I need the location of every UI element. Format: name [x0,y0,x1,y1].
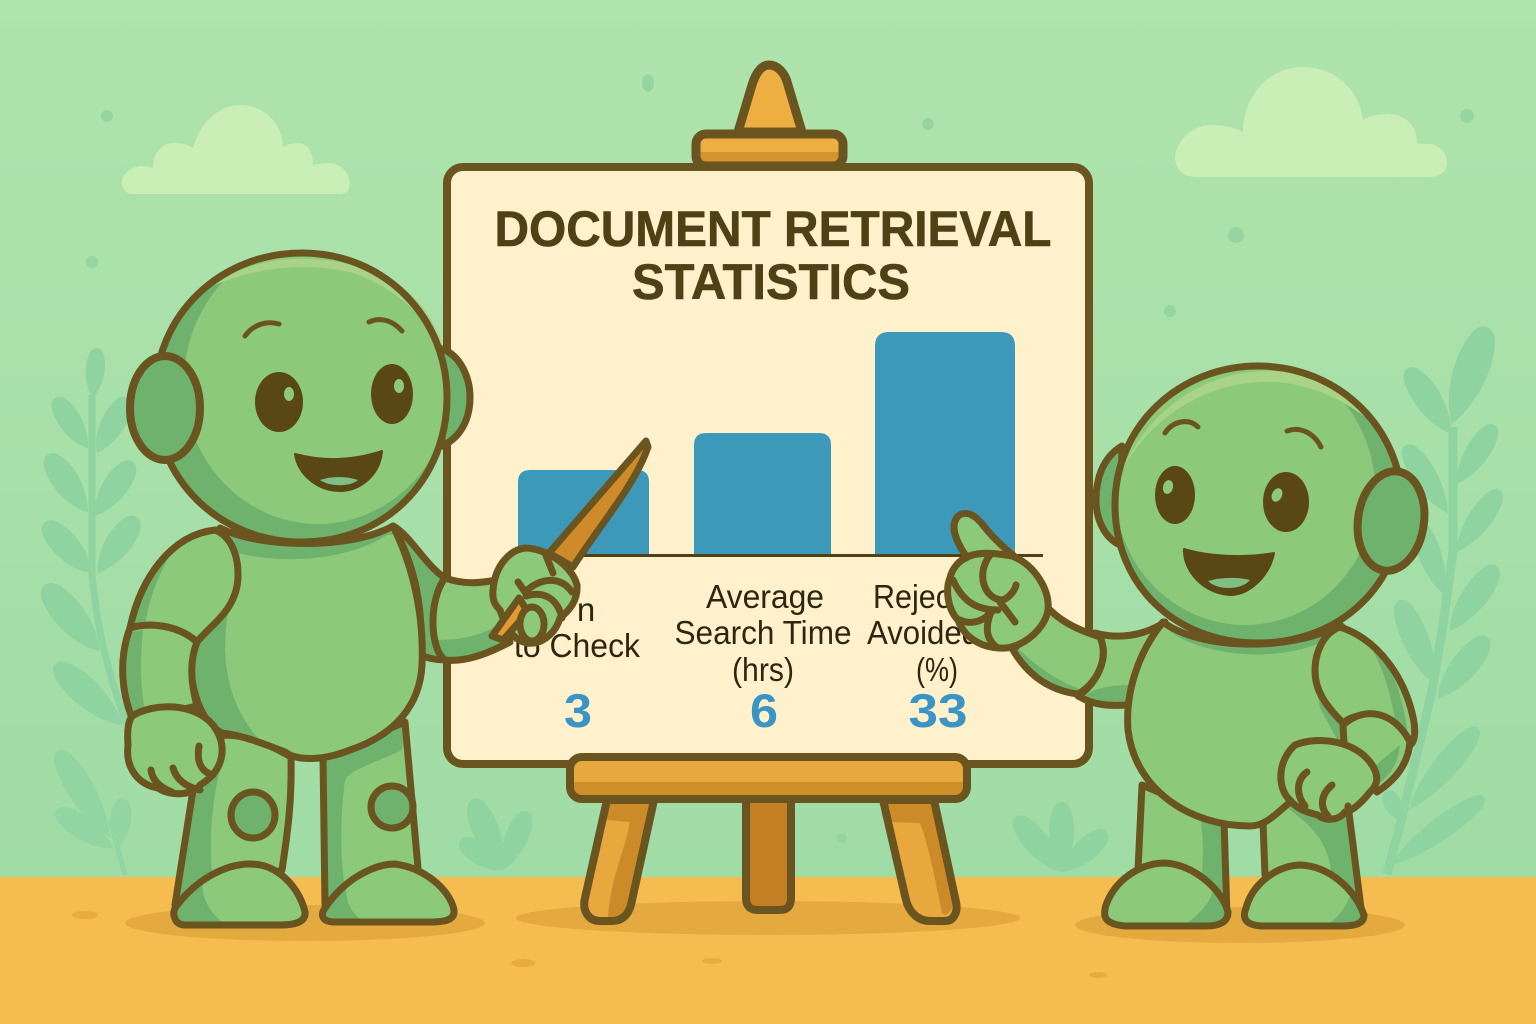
left robot lower arm [123,625,197,720]
label: average search time [674,578,852,688]
easel center leg [746,798,791,910]
left robot far ear [440,348,470,446]
easel tray [570,757,967,799]
left robot foot two [322,864,454,922]
values: 3 [564,684,592,737]
shadow right robot [1075,907,1405,943]
left robot mouth [295,451,382,491]
label: to check: n [577,591,595,628]
left robot upper arm [130,530,238,642]
pointer stick lower [492,598,528,640]
left robot body [190,526,430,770]
values: 6 [750,684,778,737]
right robot pointing hand [948,513,1048,648]
right robot mouth [1184,549,1274,595]
chart board panel [447,167,1089,764]
right robot eyes [1155,466,1309,532]
left robot head [155,240,452,542]
title: DOCUMENT RETRIEVAL [494,201,1052,257]
right robot near ear [1351,467,1431,575]
label: rejections avoided: Avoided [867,614,979,651]
values [564,684,968,737]
pointing index finger [954,513,1014,556]
right robot body [1124,618,1346,830]
shadow left robot [125,905,485,941]
right robot pointing upper arm [1078,622,1165,705]
left robot resting hand [128,707,222,794]
plant left lower [46,744,133,875]
right robot eyebrows [1165,422,1321,447]
left robot pointing upper arm [393,526,445,660]
easel [584,65,957,921]
shadow easel [516,901,1020,935]
right robot head [1115,355,1402,643]
bar: to check [518,470,649,555]
bar: average search time [694,433,831,555]
easel top cap [696,134,843,166]
right robot [948,355,1431,926]
label: rejections avoided: (%) [916,651,958,688]
right robot leg one [1138,785,1227,916]
right robot lower arm [1343,714,1410,792]
left robot knee one [231,792,275,838]
label: average search time: Average [706,578,824,615]
bar: rejections avoided [875,332,1015,555]
plant right [1379,321,1509,875]
left robot [123,240,648,925]
left robot near ear [130,356,200,460]
chart baseline [555,554,1043,557]
title: STATISTICS [632,254,910,310]
plant center left [454,794,538,879]
right robot far ear [1096,446,1122,545]
easel right leg [883,800,957,921]
pointer stick upper [549,441,648,567]
left robot leg one [175,735,291,905]
left robot eyebrows [245,320,402,336]
cloud left [122,105,350,194]
left robot leg two [323,722,418,905]
right robot pointing forearm [1013,610,1103,694]
label: rejections avoided [867,578,979,688]
label: average search time: Search Time [674,614,852,651]
label: rejections avoided: Rejec [873,578,951,615]
left robot pointing forearm [433,578,510,660]
cloud right [1175,67,1447,177]
left robot pointing hand [492,548,577,643]
easel left leg [584,800,654,921]
ground [0,877,1536,1024]
background specks [86,74,1474,843]
right robot foot one [1105,863,1228,926]
left robot knee two [371,786,413,828]
left robot eyes [255,364,413,432]
right robot foot two [1244,865,1364,926]
plant center right [1006,802,1114,880]
easel top finial [738,65,802,132]
label: average search time: (hrs) [732,651,794,688]
label: to check [514,591,640,664]
bar labels [514,578,979,688]
title [494,201,1052,310]
right robot resting hand [1281,740,1377,819]
label: to check: to Check [514,627,640,664]
values: 33 [908,684,968,737]
left robot foot one [174,864,305,925]
plant left [33,347,147,736]
bar chart [518,332,1043,557]
right robot leg two [1263,795,1362,916]
right robot upper arm [1315,627,1415,745]
